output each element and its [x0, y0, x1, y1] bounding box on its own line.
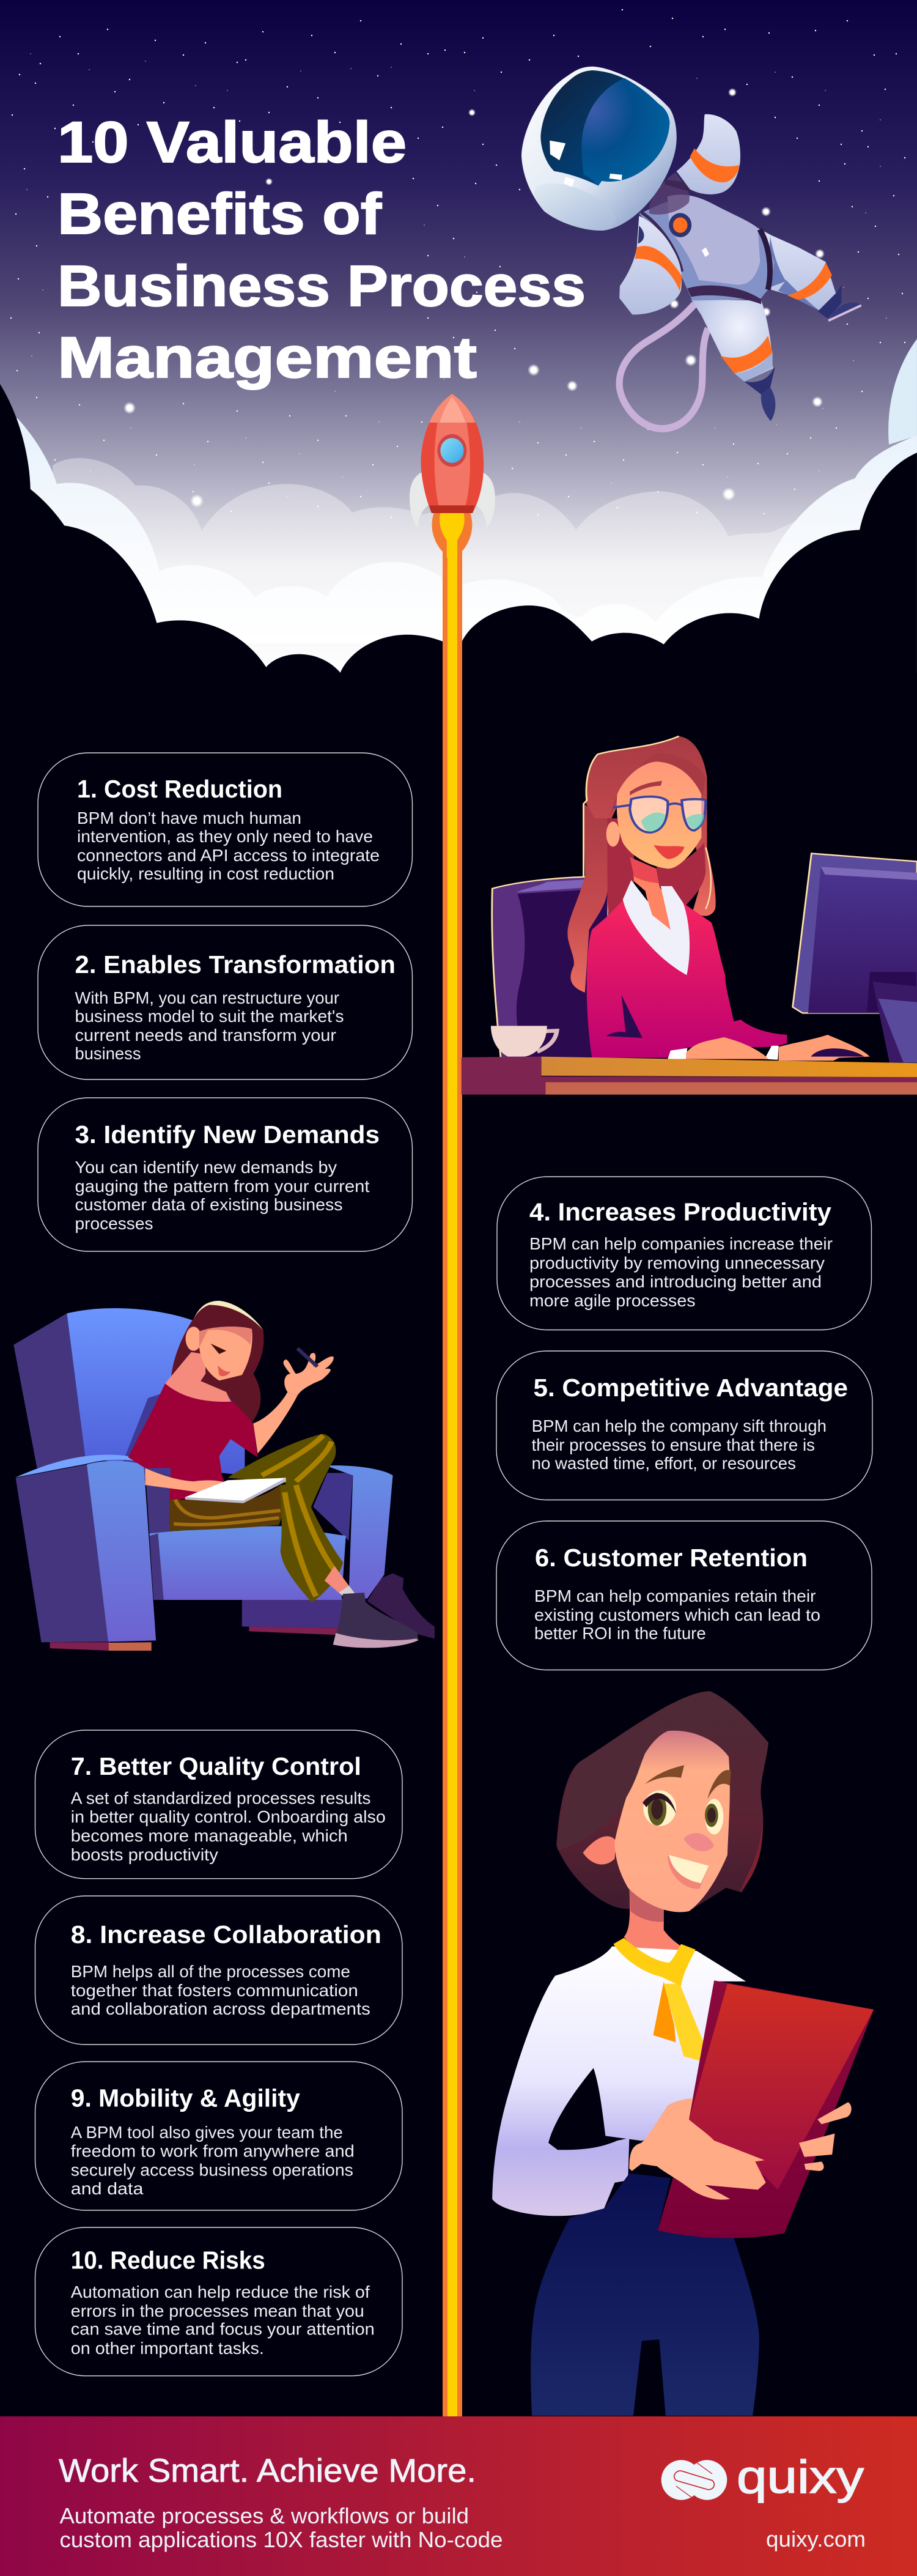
office chair — [492, 876, 608, 1058]
white blouse — [492, 1946, 746, 2216]
card 2 body: With BPM, you can restructure your — [75, 988, 339, 1007]
card 7 body — [71, 1788, 386, 1864]
card 1 body: intervention, as they only need to have — [77, 827, 373, 846]
card 8: 8. Increase Collaboration — [71, 1920, 381, 1949]
raised arm and hand — [253, 1349, 334, 1454]
card 7 — [35, 1730, 402, 1879]
red folder — [658, 1980, 874, 2238]
card 2 body: business model to suit the market's — [75, 1007, 344, 1026]
raised arm — [676, 114, 740, 194]
blazer — [587, 901, 787, 1058]
card 5: 5. Competitive Advantage — [533, 1374, 848, 1402]
card 8 body — [71, 1962, 370, 2018]
card 5 body: their processes to ensure that there is — [532, 1435, 815, 1454]
card 1 body: BPM don’t have much human — [77, 809, 301, 827]
glasses — [613, 796, 705, 832]
tether cable — [619, 304, 708, 429]
fins — [410, 472, 495, 528]
card 10 — [35, 2227, 402, 2376]
card 6: 6. Customer Retention — [535, 1544, 808, 1572]
eyes — [643, 1791, 723, 1834]
red top — [128, 1383, 257, 1500]
card 9 body: and data — [71, 2179, 144, 2198]
desk — [462, 1057, 917, 1095]
coffee cup — [491, 1026, 557, 1057]
ear — [606, 821, 620, 846]
card 4 body: processes and introducing better and — [529, 1272, 822, 1291]
hair back — [171, 1303, 263, 1422]
helmet — [521, 67, 677, 231]
card 10 body: can save time and focus your attention — [71, 2320, 375, 2339]
illustration: woman in armchair — [13, 1301, 435, 1651]
face — [186, 1327, 252, 1380]
card 9: 9. Mobility & Agility — [71, 2084, 300, 2112]
card 2 — [38, 925, 412, 1079]
card 9 body: securely access business operations — [71, 2160, 353, 2180]
card 8 body: BPM helps all of the processes come — [71, 1962, 350, 1981]
card 7 body: becomes more manageable, which — [71, 1826, 348, 1845]
footer headline: Work Smart. Achieve More. — [59, 2452, 476, 2489]
illustration: woman with red folder — [492, 1691, 874, 2416]
card 9 body: freedom to work from anywhere and — [71, 2142, 355, 2161]
card 3 body: You can identify new demands by — [75, 1158, 337, 1177]
footer description: custom applications 10X faster with No-code — [60, 2527, 503, 2552]
card 6 — [496, 1521, 872, 1670]
panel: footer banner — [0, 2416, 917, 2576]
face — [615, 1731, 731, 1912]
sneakers — [333, 1574, 435, 1648]
neck — [165, 1352, 230, 1402]
card 4: 4. Increases Productivity — [529, 1197, 831, 1226]
card 4 — [497, 1177, 872, 1330]
quixy logo — [661, 2451, 866, 2552]
title — [57, 110, 586, 390]
logo wordmark: quixy — [737, 2451, 864, 2503]
monitor — [793, 853, 917, 1063]
face — [617, 761, 701, 868]
card 10 body — [71, 2282, 375, 2358]
card 6 body: better ROI in the future — [534, 1624, 706, 1643]
illustration: floating astronaut — [521, 67, 861, 429]
flame — [432, 513, 472, 558]
card 1 body: quickly, resulting in cost reduction — [77, 864, 334, 883]
panel: launch clouds — [0, 339, 917, 686]
window — [438, 434, 466, 467]
card 3 body: processes — [75, 1214, 153, 1233]
yellow neck scarf — [613, 1938, 704, 2061]
illustration: woman at desk — [462, 736, 917, 1095]
card 7 body: boosts productivity — [71, 1845, 218, 1864]
card 9 body: A BPM tool also gives your team the — [71, 2123, 343, 2142]
hands on keyboard and mouse — [668, 1035, 870, 1060]
centre rocket trail — [443, 538, 462, 2416]
card 4 body: productivity by removing unnecessary — [529, 1254, 825, 1272]
fringe — [558, 1710, 671, 1851]
card 3 body — [75, 1158, 370, 1233]
card 8 — [35, 1896, 402, 2045]
card 3 — [38, 1098, 412, 1251]
card 7 body: A set of standardized processes results — [71, 1788, 371, 1808]
neck — [633, 864, 671, 930]
torso with belt and badge — [639, 172, 775, 304]
card 2 body: current needs and transform your — [75, 1026, 336, 1045]
card 2 body — [75, 988, 344, 1063]
card 1 body: connectors and API access to integrate — [77, 846, 380, 865]
title: Business Process — [57, 254, 586, 319]
card 5 body — [532, 1416, 827, 1473]
card 5 body: BPM can help the company sift through — [532, 1416, 827, 1435]
panel: night sky header — [0, 0, 917, 673]
illustration: rocket — [410, 394, 495, 558]
card 2 body: business — [75, 1044, 141, 1063]
card 4 body — [529, 1234, 833, 1310]
forearm — [145, 1468, 236, 1492]
card 6 body: existing customers which can lead to — [534, 1605, 820, 1624]
glowing tablet — [185, 1478, 286, 1503]
card 1 — [38, 753, 412, 906]
footer description — [60, 2503, 503, 2552]
smile — [668, 1855, 709, 1889]
bob hair — [556, 1691, 768, 1911]
title: 10 Valuable — [57, 110, 407, 175]
card 4 body: more agile processes — [529, 1291, 696, 1310]
title: Benefits of — [57, 182, 381, 246]
footer description: Automate processes & workflows or build — [60, 2503, 469, 2528]
white shirt — [623, 880, 690, 975]
card 5 — [496, 1351, 872, 1500]
card 10: 10. Reduce Risks — [71, 2246, 265, 2274]
card 6 body: BPM can help companies retain their — [534, 1586, 816, 1605]
card 3: 3. Identify New Demands — [75, 1120, 380, 1149]
trousers — [531, 2174, 759, 2416]
ankle and sock — [325, 1566, 348, 1593]
card 1: 1. Cost Reduction — [77, 775, 282, 803]
website: quixy.com — [766, 2526, 866, 2552]
body — [421, 394, 484, 513]
front leg — [691, 299, 775, 421]
title: Management — [57, 325, 477, 390]
long hair — [567, 736, 716, 993]
card 2: 2. Enables Transformation — [75, 950, 396, 979]
card 1 body — [77, 809, 380, 883]
back leg — [758, 228, 861, 320]
card 10 body: on other important tasks. — [71, 2339, 264, 2358]
lower arm — [619, 216, 682, 314]
card 3 body: gauging the pattern from your current — [75, 1177, 370, 1196]
card 3 body: customer data of existing business — [75, 1195, 342, 1214]
striped trousers — [169, 1434, 343, 1602]
card 9 body — [71, 2123, 355, 2198]
card 4 body: BPM can help companies increase their — [529, 1234, 833, 1253]
card 8 body: and collaboration across departments — [71, 1999, 370, 2018]
card 10 body: errors in the processes mean that you — [71, 2301, 364, 2320]
card 9 — [35, 2062, 402, 2210]
hair highlight — [194, 1301, 263, 1330]
logo mark — [661, 2460, 727, 2500]
card 8 body: together that fosters communication — [71, 1981, 358, 2000]
armchair — [13, 1308, 393, 1651]
card 7: 7. Better Quality Control — [71, 1752, 361, 1780]
card 6 body — [534, 1586, 820, 1643]
card 10 body: Automation can help reduce the risk of — [71, 2282, 370, 2301]
ear — [583, 1836, 616, 1865]
hands — [629, 2098, 852, 2200]
neck — [624, 1888, 681, 1963]
card 7 body: in better quality control. Onboarding also — [71, 1807, 386, 1826]
card 5 body: no wasted time, effort, or resources — [532, 1454, 796, 1473]
